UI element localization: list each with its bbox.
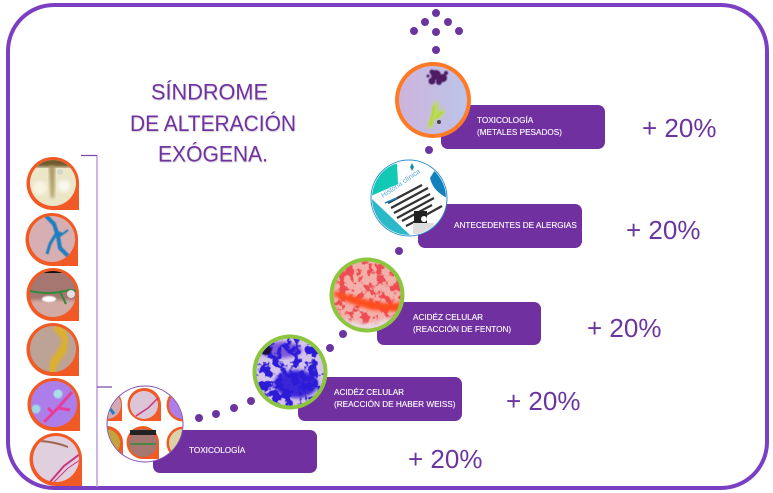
sample thumbnails column xyxy=(26,157,82,486)
percentage: + 20% xyxy=(587,313,661,343)
step 3: acidez celular fenton xyxy=(330,258,661,345)
connecting dots xyxy=(195,9,463,422)
label bar: ACIDÉZ CELULAR xyxy=(413,312,483,322)
label bar xyxy=(377,302,541,345)
sample collage circle xyxy=(106,386,184,462)
thumbnail 6: pink lines on pale tissue xyxy=(30,433,82,486)
label bar: TOXICOLOGÍA xyxy=(189,445,246,455)
microscope image circle xyxy=(252,334,328,410)
thumbnail 5: violet with pink stain xyxy=(28,378,80,431)
label bar: (REACCIÓN DE HABER WEISS) xyxy=(334,399,456,409)
label bar xyxy=(441,105,605,149)
title: SÍNDROME xyxy=(151,80,268,104)
thumbnail 3: green stained mucosa xyxy=(27,268,79,321)
label bar xyxy=(418,204,582,248)
title: EXÓGENA. xyxy=(158,142,268,167)
label bar: (METALES PESADOS) xyxy=(477,128,562,137)
label bar xyxy=(153,430,317,473)
step 4: antecedentes de alergias xyxy=(371,160,700,248)
title xyxy=(130,80,296,167)
thumbnail 4: yellow stain xyxy=(27,323,79,376)
thumbnail 2: blue stain xyxy=(26,213,78,266)
percentage: + 20% xyxy=(626,215,700,245)
percentage: + 20% xyxy=(642,113,716,143)
bracket linking samples to toxicology xyxy=(81,156,112,487)
label bar xyxy=(298,377,462,421)
label bar: (REACCIÓN DE FENTON) xyxy=(413,324,511,334)
metals stain image circle xyxy=(395,62,471,138)
thumbnail 1: pale tissue xyxy=(27,157,79,210)
percentage: + 20% xyxy=(506,386,580,416)
clinical history image circle xyxy=(371,160,447,236)
label bar: ANTECEDENTES DE ALERGIAS xyxy=(454,221,577,230)
label bar: ACIDÉZ CELULAR xyxy=(334,387,404,397)
percentage: + 20% xyxy=(408,444,482,474)
title: DE ALTERACIÓN xyxy=(130,111,296,136)
step 1: toxicología xyxy=(92,386,482,474)
step 2: acidez celular haber weiss xyxy=(252,334,580,421)
red stain image circle xyxy=(330,258,404,332)
clinical history image circle: Historia clínica xyxy=(380,168,422,200)
label bar: TOXICOLOGÍA xyxy=(477,115,534,125)
step 5: toxicología metales pesados xyxy=(395,62,716,149)
